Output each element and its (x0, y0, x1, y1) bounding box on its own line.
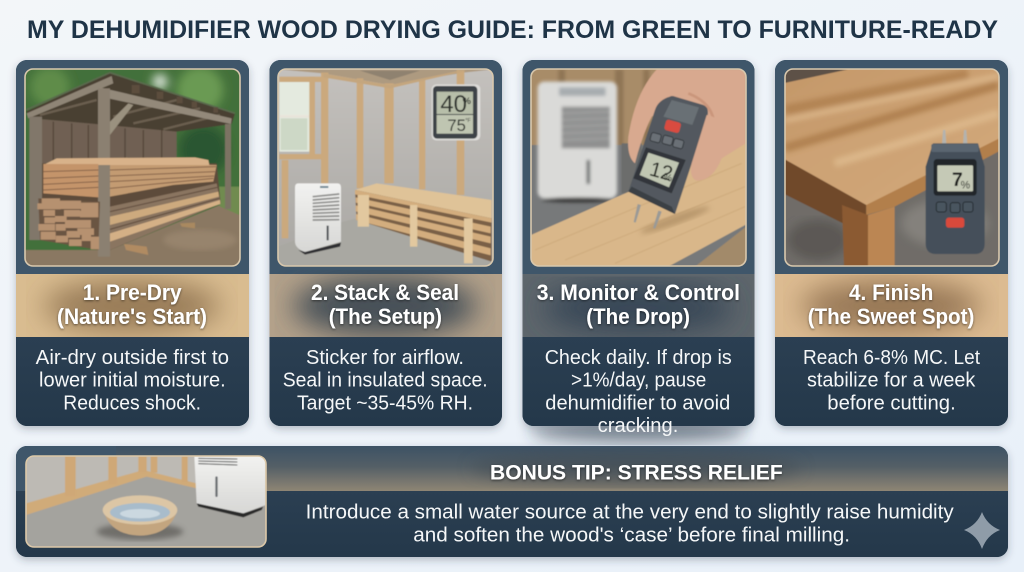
description (36, 347, 229, 414)
image frame (278, 69, 493, 266)
title: MY DEHUMIDIFIER WOOD DRYING GUIDE: FROM GREEN TO FURNITURE-READY (27, 16, 998, 44)
image: hand pressing moisture meter into board: % (662, 172, 673, 185)
description (306, 501, 954, 547)
description: Introduce a small water source at the very end to slightly raise humidity (306, 501, 954, 523)
image: water bowl near dehumidifier (23, 453, 270, 550)
image: lumber stacked under an open shed (20, 67, 243, 267)
description: Target ~35-45% RH. (297, 392, 473, 414)
image: sealed room with stack, dehumidifier and hygrometer: % (463, 96, 472, 106)
panel: bonus tip (16, 446, 1008, 557)
thumb (691, 115, 746, 181)
description (803, 347, 980, 414)
heading: 1. Pre-Dry (83, 280, 182, 305)
dehumidifier (194, 456, 266, 513)
lower lumber (110, 183, 221, 250)
heading: (The Sweet Spot) (808, 304, 974, 329)
heading: (The Drop) (586, 304, 690, 329)
description: dehumidifier to avoid (545, 392, 730, 414)
image: hand pressing moisture meter into board (528, 67, 752, 268)
dehumidifier (295, 183, 341, 252)
board (531, 140, 748, 267)
hand (627, 70, 746, 164)
description: >1%/day, pause (571, 370, 706, 392)
heading: (Nature's Start) (57, 304, 207, 329)
meter (942, 130, 946, 144)
description: Reach 6-8% MC. Let (803, 347, 980, 369)
description: Sticker for airflow. (306, 347, 464, 369)
roof (26, 73, 235, 132)
back wall (42, 118, 178, 164)
description (545, 347, 732, 437)
image frame (25, 69, 240, 266)
stack (355, 183, 492, 218)
image: sealed room with stack, dehumidifier and hygrometer (277, 67, 497, 267)
upper lumber (110, 163, 217, 197)
icon: sparkle (964, 512, 1000, 549)
panel: step 3 monitor and control (522, 60, 754, 443)
description: cracking. (598, 415, 678, 437)
image frame (26, 456, 266, 547)
description: Check daily. If drop is (545, 347, 732, 369)
image frame (531, 69, 746, 266)
image: finished table with meter reading 7% (783, 67, 1003, 267)
heading (537, 280, 740, 329)
description: Reduces shock. (63, 392, 201, 414)
description: before cutting. (827, 392, 956, 414)
image frame (785, 69, 999, 266)
panel: step 4 finish (775, 60, 1008, 426)
heading: (The Setup) (329, 304, 442, 329)
description: and soften the wood's ‘case’ before final milling. (413, 525, 850, 547)
image: sealed room with stack, dehumidifier and hygrometer: °F (465, 118, 471, 124)
image: finished table with meter reading 7%: 7 (952, 170, 963, 191)
image: sealed room with stack, dehumidifier and hygrometer: 40 (440, 91, 467, 118)
heading: BONUS TIP: STRESS RELIEF (490, 461, 783, 484)
pins (634, 204, 641, 223)
panel: step 1 pre-dry (16, 60, 249, 426)
stack backing (42, 162, 221, 207)
image: finished table with meter reading 7%: % (961, 180, 971, 192)
hygrometer (432, 84, 480, 140)
image: hand pressing moisture meter into board: 12 (647, 158, 675, 186)
description (283, 347, 488, 414)
heading: 4. Finish (849, 280, 933, 305)
heading (57, 280, 207, 329)
blurred dehumidifier (538, 82, 617, 203)
description: Air-dry outside first to (36, 347, 229, 369)
image: sealed room with stack, dehumidifier and hygrometer: 75 (447, 116, 466, 135)
meter (628, 96, 708, 214)
beams (27, 76, 113, 118)
heading (311, 280, 459, 329)
panel: step 2 stack and seal (270, 60, 502, 426)
description: lower initial moisture. (39, 370, 226, 392)
description: Seal in insulated space. (283, 370, 488, 392)
heading: 2. Stack & Seal (311, 280, 459, 305)
heading (808, 280, 974, 329)
heading: 3. Monitor & Control (537, 280, 740, 305)
description: stabilize for a week (807, 370, 976, 392)
